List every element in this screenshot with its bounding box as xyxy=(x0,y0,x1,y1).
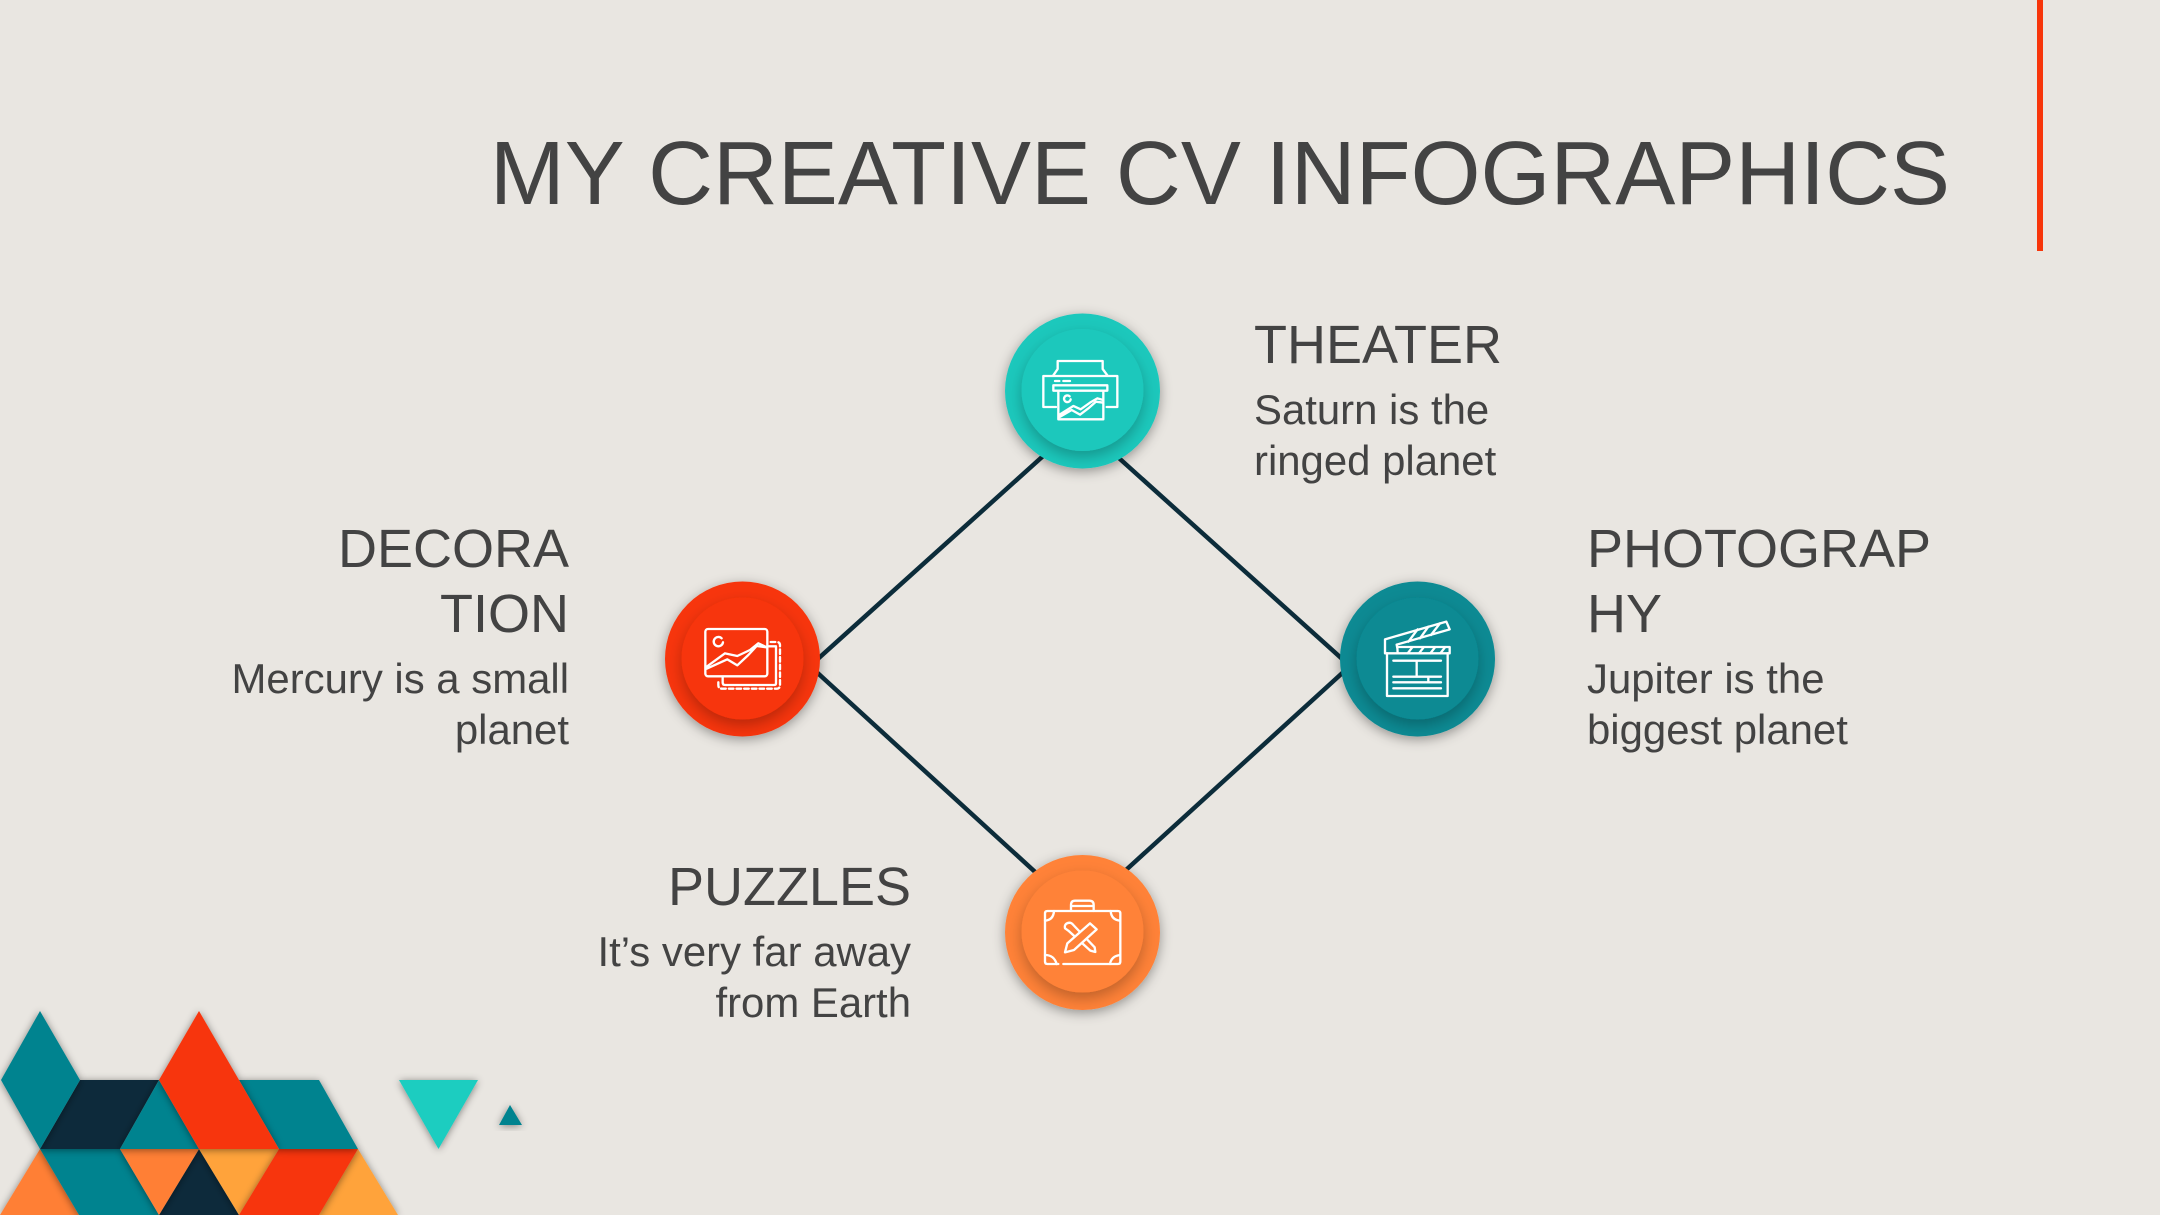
text: puzzles xyxy=(597,857,911,1026)
text: photography: biggest planet xyxy=(1587,706,1848,753)
title: MY CREATIVE CV INFOGRAPHICS xyxy=(490,124,1950,224)
text: theater xyxy=(1254,315,1502,484)
text: photography: HY xyxy=(1587,584,1662,644)
icon: printer xyxy=(1043,361,1117,419)
node: theater xyxy=(1005,314,1160,468)
small teal triangle xyxy=(499,1105,522,1125)
text: photography: PHOTOGRAP xyxy=(1587,519,1931,579)
text: decoration: planet xyxy=(455,706,569,753)
text: decoration: TION xyxy=(440,584,569,644)
text: theater: ringed planet xyxy=(1254,437,1497,484)
text: puzzles: It’s very far away xyxy=(597,928,911,975)
text: decoration xyxy=(232,519,569,753)
node: photography xyxy=(1340,582,1495,736)
icon: briefcase with tools xyxy=(1045,901,1120,964)
text: puzzles: from Earth xyxy=(715,979,911,1026)
text: decoration: DECORA xyxy=(338,519,569,579)
icon: image stack xyxy=(705,629,780,689)
node: decoration xyxy=(665,582,820,736)
text: decoration: Mercury is a small xyxy=(232,655,569,702)
decorative triangle mosaic xyxy=(0,1011,398,1215)
accent bar xyxy=(2037,0,2043,251)
turquoise triangle xyxy=(399,1080,478,1149)
node: puzzles xyxy=(1005,855,1160,1010)
text: photography: Jupiter is the xyxy=(1587,655,1824,702)
text: theater: Saturn is the xyxy=(1254,386,1489,433)
text: photography xyxy=(1587,519,1931,753)
icon: clapperboard xyxy=(1385,622,1450,696)
text: puzzles: PUZZLES xyxy=(668,857,911,917)
text: theater: THEATER xyxy=(1254,315,1502,375)
connector diamond xyxy=(810,448,1350,881)
